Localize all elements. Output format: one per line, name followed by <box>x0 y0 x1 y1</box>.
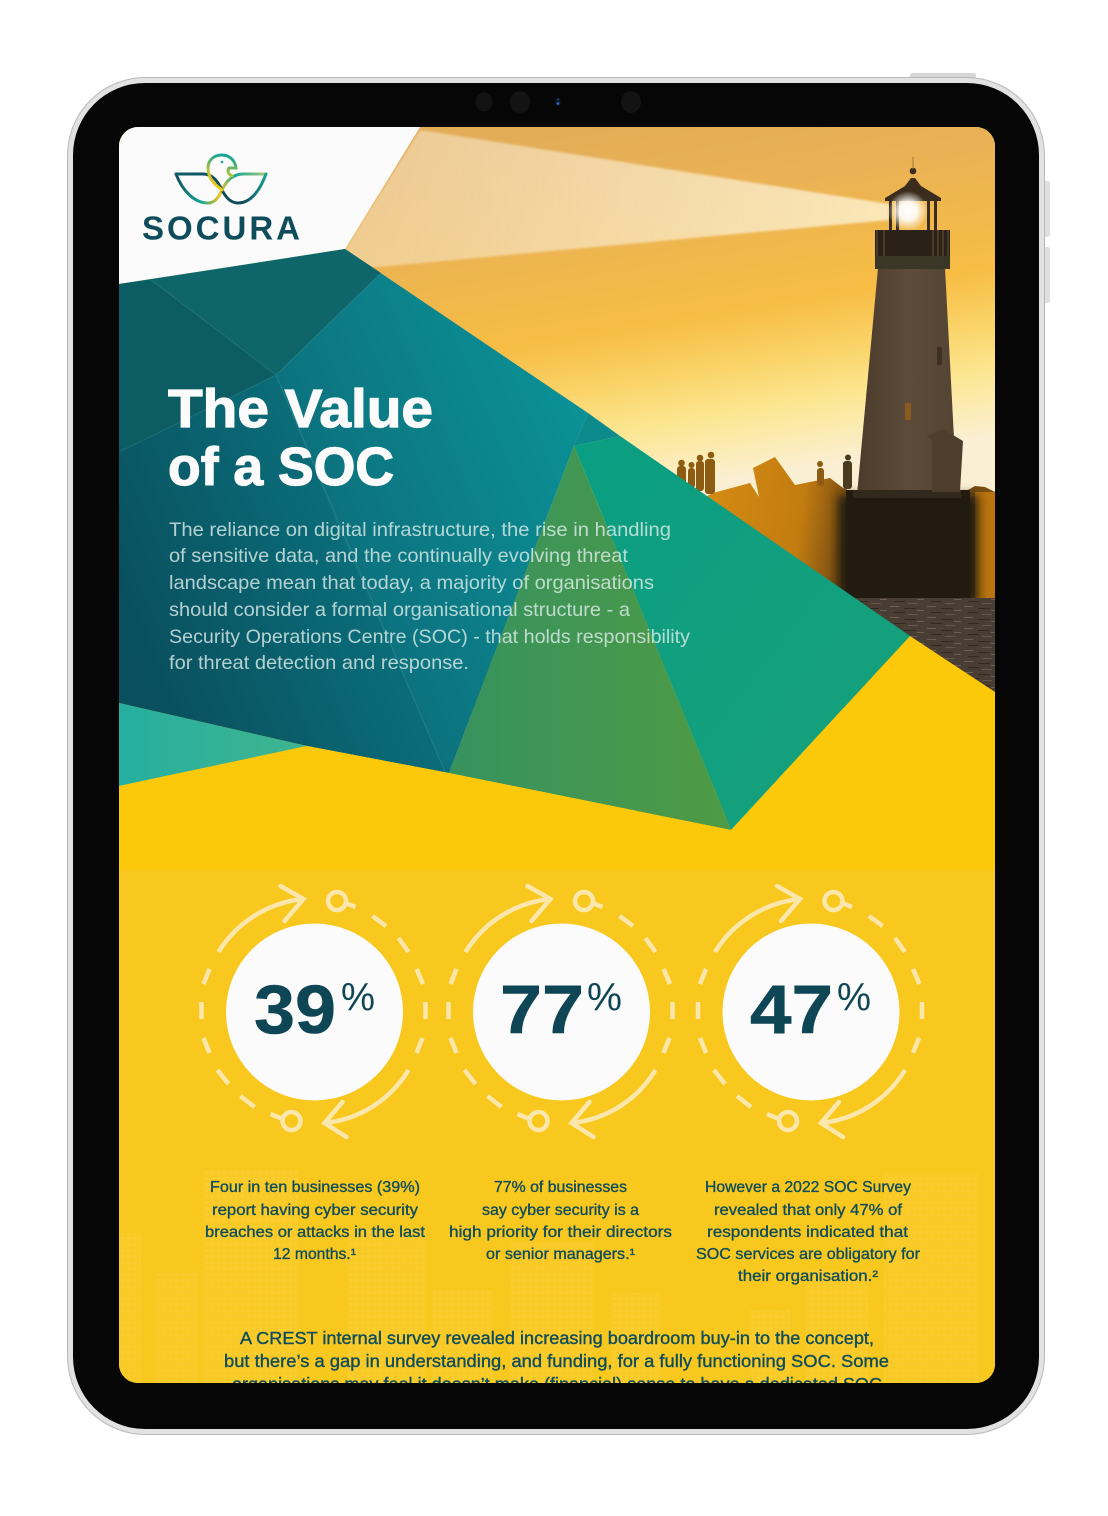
faint skyline pattern <box>119 1170 979 1383</box>
title: The Value <box>168 379 433 439</box>
caption: 39%: breaches or attacks in the last <box>205 1224 426 1241</box>
stat: 39%: % <box>341 976 375 1020</box>
caption: 39%: 12 months.¹ <box>273 1246 356 1263</box>
intro paragraph: should consider a formal organisational structure - a <box>169 599 630 621</box>
caption: 47%: respondents indicated that <box>707 1224 909 1241</box>
intro paragraph: of sensitive data, and the continually evolving threat <box>169 545 629 567</box>
lighthouse sunset photo <box>340 127 1005 708</box>
logo panel <box>119 127 420 284</box>
intro paragraph: Security Operations Centre (SOC) - that holds responsibility <box>169 626 690 648</box>
closing paragraph <box>224 1330 888 1383</box>
people silhouettes <box>677 452 824 494</box>
stat: 39% <box>202 886 426 1137</box>
lighthouse tower <box>853 157 963 498</box>
stat: 47%: 47 <box>750 971 833 1048</box>
caption: 39%: Four in ten businesses (39%) <box>210 1179 420 1196</box>
caption: 77%: or senior managers.¹ <box>486 1246 635 1263</box>
caption: 47% <box>696 1179 920 1285</box>
sea water <box>844 598 995 708</box>
stat: 77%: 77 <box>500 971 584 1048</box>
title <box>168 387 432 486</box>
person <box>843 454 852 489</box>
caption: 47%: SOC services are obligatory for <box>696 1246 920 1263</box>
logo: bird icon <box>176 155 266 203</box>
caption: 77%: 77% of businesses <box>494 1179 627 1196</box>
intro paragraph: landscape mean that today, a majority of organisations <box>169 572 654 594</box>
stat: 77% <box>448 886 672 1137</box>
intro paragraph <box>169 519 690 674</box>
caption: 77%: say cyber security is a <box>482 1202 639 1219</box>
intro paragraph: for threat detection and response. <box>169 652 469 674</box>
caption: 77%: high priority for their directors <box>449 1224 672 1241</box>
stat: 47% <box>698 886 922 1137</box>
caption: 47%: revealed that only 47% of <box>714 1202 903 1219</box>
stat: 47%: % <box>837 976 871 1020</box>
infographic screen <box>119 127 1005 1394</box>
closing paragraph: organisations may feel it doesn’t make (financial) sense to have a dedicated SOC <box>232 1374 882 1394</box>
stat: 77%: % <box>587 976 622 1020</box>
caption: 47%: However a 2022 SOC Survey <box>705 1179 911 1196</box>
caption: 39%: report having cyber security <box>212 1202 418 1219</box>
caption: 39% <box>205 1179 426 1263</box>
caption: 47%: their organisation.² <box>738 1268 878 1285</box>
light beam <box>345 130 889 270</box>
closing paragraph: but there’s a gap in understanding, and funding, for a fully functioning SOC. Some <box>224 1351 889 1371</box>
title: of a SOC <box>168 437 394 497</box>
stat: 39%: 39 <box>254 971 336 1048</box>
tablet device frame <box>68 73 1050 1434</box>
closing paragraph: A CREST internal survey revealed increasing boardroom buy-in to the concept, <box>240 1328 874 1348</box>
yellow lower panel <box>119 636 995 1383</box>
logo: wordmark: SOCURA <box>142 210 300 246</box>
caption: 77% <box>449 1179 672 1263</box>
intro paragraph: The reliance on digital infrastructure, the rise in handling <box>169 519 671 541</box>
rocks and jetty <box>707 457 995 598</box>
geometric hero panels <box>119 249 910 830</box>
